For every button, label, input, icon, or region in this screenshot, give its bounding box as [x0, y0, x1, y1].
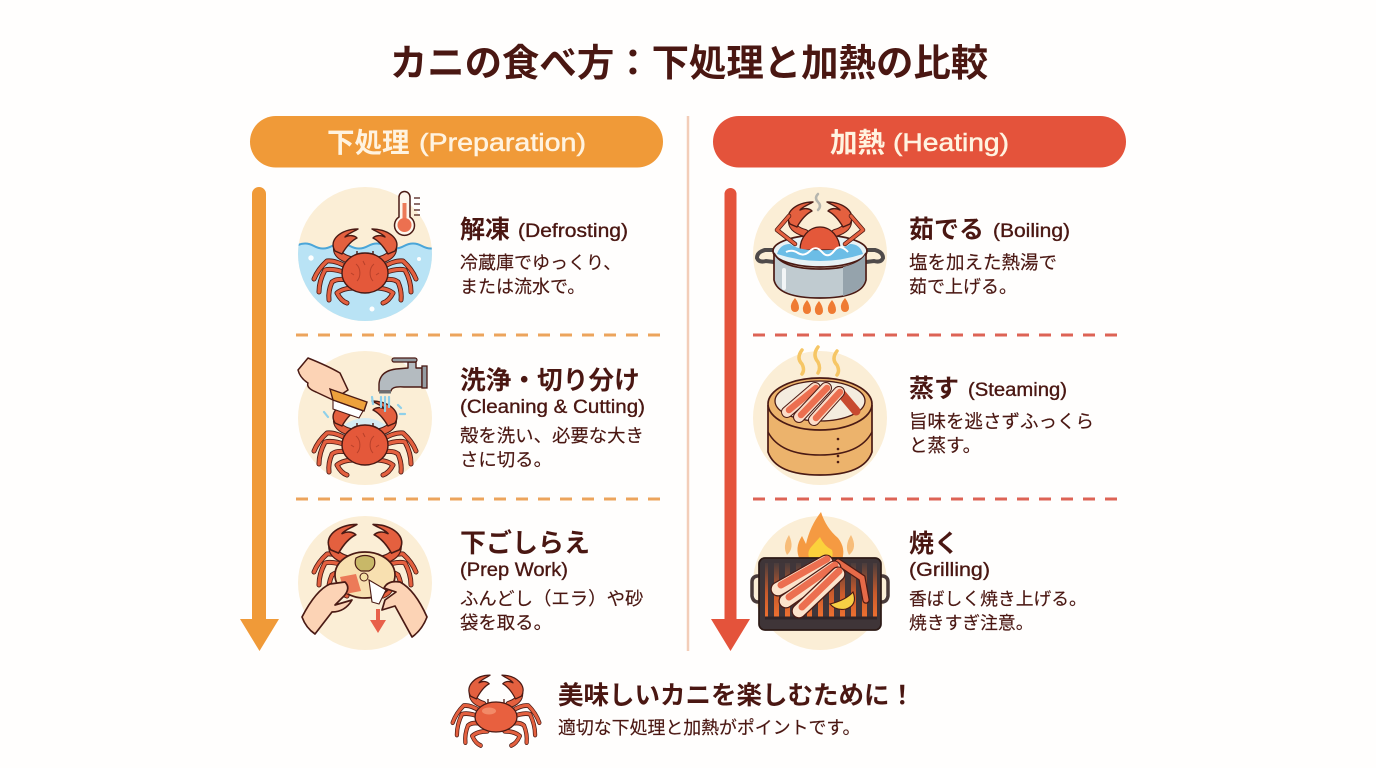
step description: 冷蔵庫でゆっくり、 [460, 253, 621, 273]
panel: preparation [240, 116, 663, 651]
icon: crab in water with thermometer [296, 187, 440, 325]
step description: ふんどし（エラ）や砂 [460, 588, 643, 609]
heating header pill: 加熱 [830, 127, 885, 158]
icon: hands removing gills [298, 516, 432, 650]
step: steaming: と蒸す。 [909, 435, 981, 456]
column divider [687, 116, 689, 651]
preparation header pill [250, 116, 663, 168]
step title: 焼く [909, 530, 959, 558]
step description: 殻を洗い、必要な大き [460, 425, 644, 446]
step: steaming: (Steaming) [968, 380, 1067, 401]
step: boiling: 茹で上げる。 [909, 277, 1017, 297]
preparation header pill: 下処理 [327, 127, 410, 158]
icon: hand with brush [298, 358, 367, 418]
step: defrosting [296, 187, 628, 325]
step: boiling: (Boiling) [993, 221, 1070, 242]
preparation header pill: (Preparation) [419, 129, 586, 157]
step title: 洗浄・切り分け [460, 366, 640, 395]
step description: 塩を加えた熱湯で [909, 252, 1057, 273]
icon: grilled crab legs [752, 512, 888, 650]
heating header pill: (Heating) [893, 129, 1009, 157]
icon: brushing crab under faucet [298, 351, 432, 485]
step: defrosting: (Defrosting) [518, 221, 628, 242]
step description: 旨味を逃さずふっくら [909, 411, 1094, 432]
step: prep work [298, 516, 643, 650]
heating flow arrow [711, 188, 750, 651]
step title: 茹でる [909, 216, 984, 244]
icon: crab mascot [453, 675, 539, 746]
step title: 解凍 [460, 216, 510, 244]
icon: grill flames [785, 512, 854, 560]
title: カニの食べ方：下処理と加熱の比較 [390, 42, 988, 84]
step: prep work: 袋を取る。 [460, 612, 552, 633]
step: boiling [753, 187, 1070, 321]
step english label: (Prep Work) [460, 560, 568, 581]
panel: heating [711, 116, 1126, 651]
heating header pill [713, 116, 1126, 168]
step title: 蒸す [909, 375, 959, 403]
step english label: (Cleaning & Cutting) [460, 397, 645, 418]
icon: crab in boiling pot [753, 187, 887, 321]
icon: thermometer [395, 192, 420, 235]
preparation flow arrow [240, 187, 279, 651]
step: grilling: 焼きすぎ注意。 [909, 613, 1033, 633]
step: cleaning and cutting: さに切る。 [460, 449, 552, 470]
step description: 香ばしく焼き上げる。 [909, 589, 1087, 609]
step english label: (Grilling) [909, 560, 990, 581]
step: cleaning and cutting [298, 351, 645, 485]
step title: 下ごしらえ [460, 528, 590, 558]
icon: burner flames [791, 298, 849, 315]
step: grilling [752, 512, 1087, 650]
step: steaming [753, 347, 1094, 485]
footer callout [453, 675, 915, 746]
icon: bamboo steamer [753, 347, 887, 485]
icon: faucet [379, 358, 427, 392]
step: defrosting: または流水で。 [460, 277, 585, 297]
callout heading: 美味しいカニを楽しむために！ [558, 682, 915, 710]
callout text: 適切な下処理と加熱がポイントです。 [558, 718, 860, 738]
